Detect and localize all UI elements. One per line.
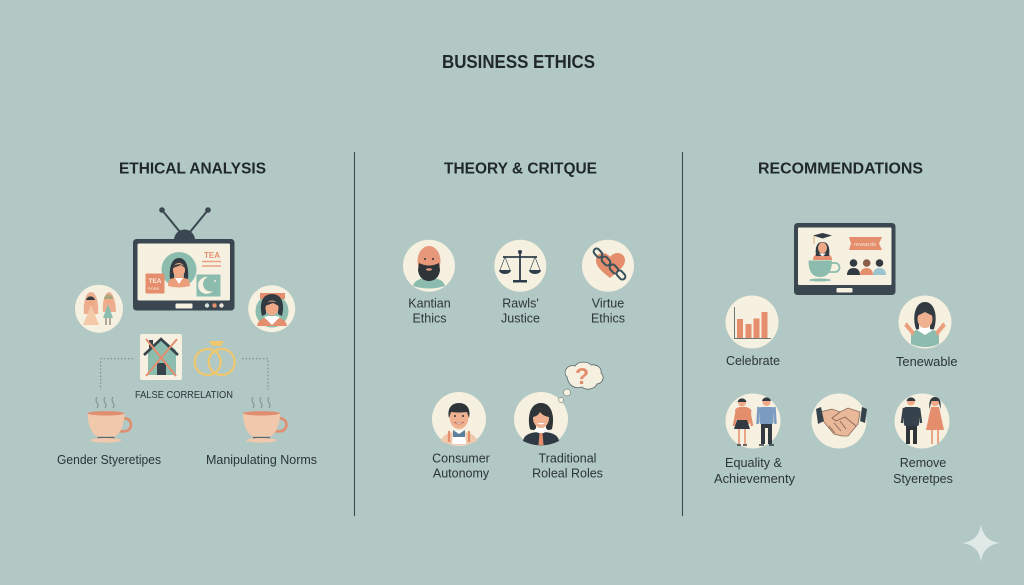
icon: tablet: rewards (854, 242, 877, 248)
label: Traditional Roleal Roles: Traditional (539, 452, 596, 466)
icon: two girls (75, 285, 123, 333)
icon: crossed-out house (140, 334, 182, 380)
icon: handshake (812, 394, 867, 448)
label: Consumer Autonomy: Consumer (432, 452, 490, 466)
label: false correlation: FALSE CORRELATION (135, 389, 233, 401)
label: gender stereotypes: Gender Styeretipes (57, 453, 161, 467)
icon: man and woman formal (894, 394, 950, 448)
icon: traditional woman (514, 392, 568, 446)
icon: thought bubble with question mark: ? (575, 363, 589, 389)
label: Tenewable: Tenewable (896, 355, 958, 369)
icon: sparkle watermark (962, 524, 1000, 562)
heading: recommendations: RECOMMENDATIONS (758, 160, 923, 178)
label: Virtue Ethics: Ethics (591, 312, 625, 326)
icon: wedding rings (195, 341, 235, 375)
heading: ethical analysis: ETHICAL ANALYSIS (119, 160, 266, 178)
dotted connector: left (101, 359, 133, 390)
label: Remove Stereotypes: Styeretpes (893, 472, 953, 486)
icon: man and woman (726, 394, 780, 448)
dividers (354, 152, 682, 516)
panel: theory and critique (403, 160, 634, 480)
icon: thought bubble with question mark (558, 362, 603, 402)
label: Remove Stereotypes: Remove (900, 456, 946, 470)
icon: television: TEA (204, 251, 220, 260)
label: Traditional Roleal Roles: Roleal Roles (532, 466, 603, 480)
icon: scales of justice (494, 240, 546, 292)
label: Virtue Ethics: Virtue (592, 296, 624, 310)
panel: ethical analysis (57, 160, 317, 467)
icon: bar chart (726, 296, 778, 348)
heading: theory and critique: THEORY & CRITQUE (444, 160, 597, 178)
label: Achievementy: Achievementy (714, 472, 796, 486)
icon: television (133, 207, 234, 310)
dotted connector: right (242, 359, 268, 390)
label: Consumer Autonomy: Autonomy (433, 466, 490, 480)
icon: television: PORK (148, 286, 160, 291)
label: Rawls' Justice: Rawls' (502, 296, 539, 310)
icon: consumer man (432, 392, 486, 446)
icon: Kantian bearded man (403, 240, 455, 292)
label: Celebrate: Celebrate (726, 354, 780, 368)
label: Kantian Ethics: Kantian (408, 296, 451, 310)
label: manipulating norms: Manipulating Norms (206, 453, 317, 467)
icon: welcoming woman (898, 296, 952, 348)
label: Equality and Achievement: Equality & (725, 456, 783, 470)
icon: chained heart (582, 240, 634, 292)
icon: tea cup left (88, 397, 131, 443)
title: BUSINESS ETHICS (442, 52, 595, 72)
label: Kantian Ethics: Ethics (412, 312, 447, 326)
icon: television: TEA (148, 278, 162, 285)
label: Rawls' Justice: Justice (501, 312, 540, 326)
icon: tablet (794, 223, 896, 295)
icon: tea cup right (243, 397, 286, 443)
panel: recommendations (714, 160, 958, 486)
icon: woman portrait (248, 285, 295, 332)
